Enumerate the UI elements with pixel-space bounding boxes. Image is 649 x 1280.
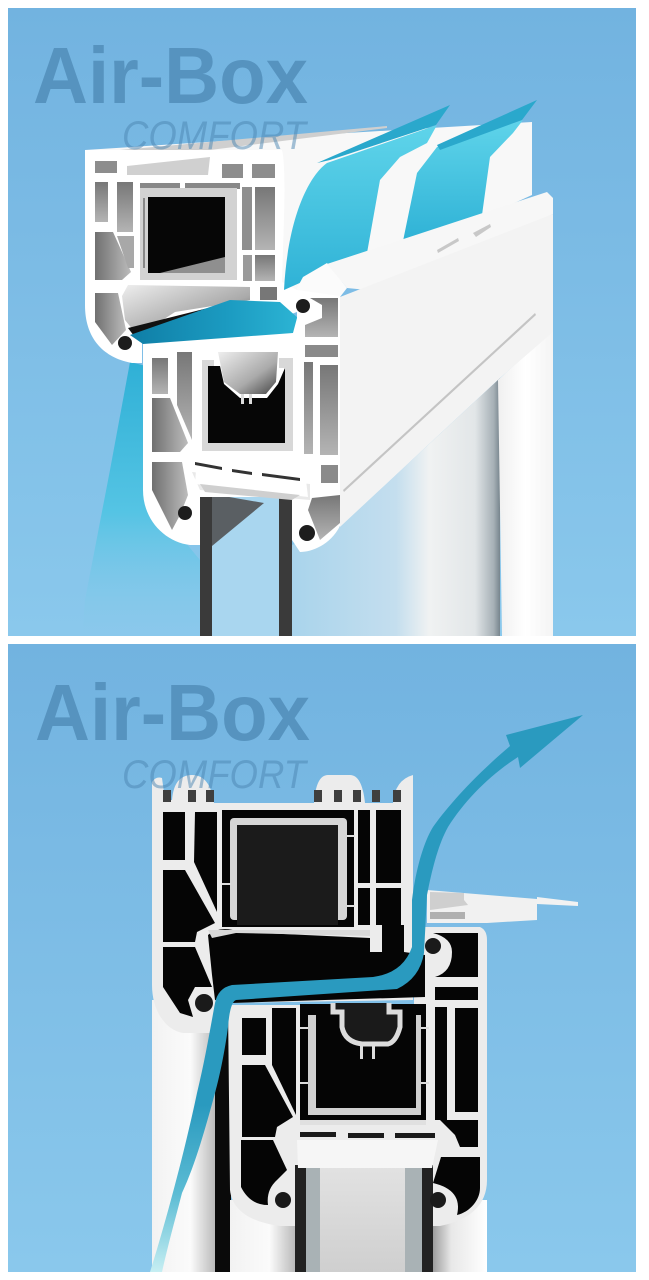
upper steel reinforcement (140, 188, 237, 280)
lower cut section (143, 290, 340, 552)
upper frame section (152, 775, 413, 1033)
window cap drip (427, 890, 578, 923)
upper section hollows (95, 157, 277, 345)
top sill line (120, 126, 387, 150)
logo: Air-Box Comfort: Air-Box (35, 668, 310, 757)
air channel (208, 925, 425, 1003)
lower frame jambs (230, 1200, 487, 1272)
curved air flow arrow (150, 715, 583, 1272)
upper channel (122, 285, 250, 336)
glass between panes (212, 490, 280, 636)
lower frame section (228, 927, 487, 1226)
upper hollows (163, 810, 401, 1017)
air slot dark line (128, 302, 232, 336)
logo: Air-Box Comfort: COMFORT (122, 753, 308, 797)
panel: bottom cross-section view (8, 644, 636, 1272)
bead and dashes (192, 462, 310, 500)
bead dashes (300, 1132, 435, 1138)
lower notch (218, 352, 278, 394)
gaskets (118, 299, 315, 541)
logo: Air-Box Comfort (35, 668, 310, 797)
top teeth (163, 790, 401, 802)
sash top cover (327, 192, 553, 292)
upper frame extrusion (85, 122, 532, 300)
channel border (208, 930, 370, 938)
logo: Air-Box Comfort: COMFORT (122, 114, 308, 158)
gaskets (195, 938, 446, 1208)
lower left hollows (241, 1008, 296, 1205)
panel background (8, 8, 636, 636)
panel: top 3D cutaway view (8, 8, 636, 636)
glass pane view (292, 378, 500, 636)
lower steel and inner cavity (300, 1003, 429, 1125)
upper steel reinforcement (222, 818, 355, 925)
left jamb (152, 1000, 216, 1272)
sealed glass unit (295, 1140, 438, 1272)
air flow falling down (82, 362, 200, 636)
logo: Air-Box Comfort: Air-Box (33, 31, 308, 120)
ribbon tip shadows (317, 100, 537, 163)
frame joint filler (297, 263, 347, 310)
jamb (498, 330, 553, 636)
cover clips (437, 224, 491, 253)
upper frame cut section (85, 150, 297, 363)
panel background (8, 644, 636, 1272)
inner shadow (212, 494, 264, 546)
airflow ribbon 1 (284, 125, 437, 290)
lower steel reinforcement (202, 358, 293, 451)
lower section hollows (152, 298, 340, 540)
logo: Air-Box Comfort (33, 31, 308, 158)
right frame hollows (433, 933, 480, 1215)
glass pane bars (200, 490, 292, 636)
sash side face (340, 214, 553, 527)
airflow ribbon 2 (403, 120, 523, 241)
middle airflow (130, 300, 298, 344)
